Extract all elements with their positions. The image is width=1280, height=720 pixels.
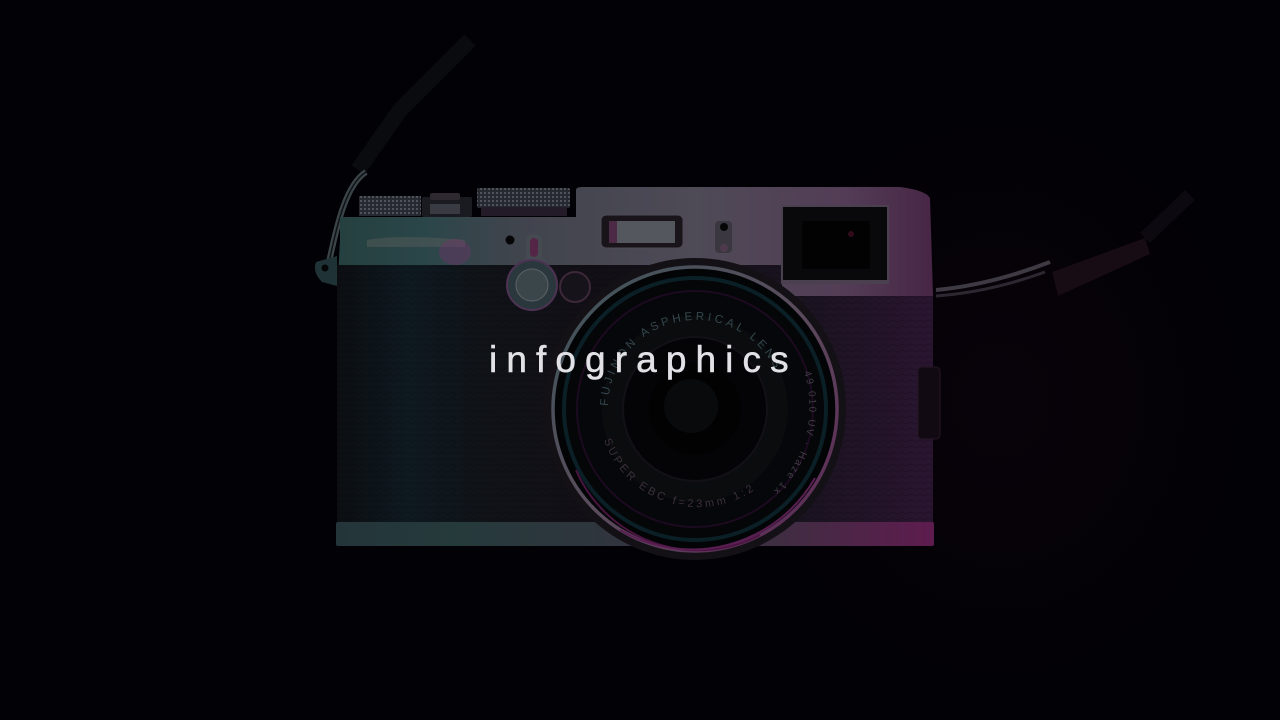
small indicator xyxy=(715,221,732,253)
viewfinder window xyxy=(781,205,889,284)
pink reflection xyxy=(439,239,471,265)
bottom plate xyxy=(336,522,934,546)
lens inscription: FUJINON ASPHERICAL LENS xyxy=(600,312,780,406)
neck strap right xyxy=(936,195,1190,296)
lens inscription xyxy=(600,312,816,508)
strap ring left xyxy=(329,172,366,262)
top plate xyxy=(337,187,933,296)
top dials xyxy=(359,188,570,217)
shutter lever and button xyxy=(507,234,590,310)
background glow xyxy=(740,100,1260,700)
title: infographics xyxy=(489,339,798,380)
side latch xyxy=(918,367,940,439)
camera xyxy=(314,34,1194,560)
leather body xyxy=(337,265,933,523)
lens inscription: SUPER EBC f=23mm 1:2 xyxy=(604,438,754,508)
screw hole xyxy=(506,236,514,244)
lens arc highlight xyxy=(576,470,760,550)
frame counter window xyxy=(601,215,683,248)
lens inscription: 49 010 UV · Haze 1x E xyxy=(774,372,816,494)
neck strap left xyxy=(315,40,470,286)
lens xyxy=(551,258,846,560)
plate highlight xyxy=(367,237,465,247)
